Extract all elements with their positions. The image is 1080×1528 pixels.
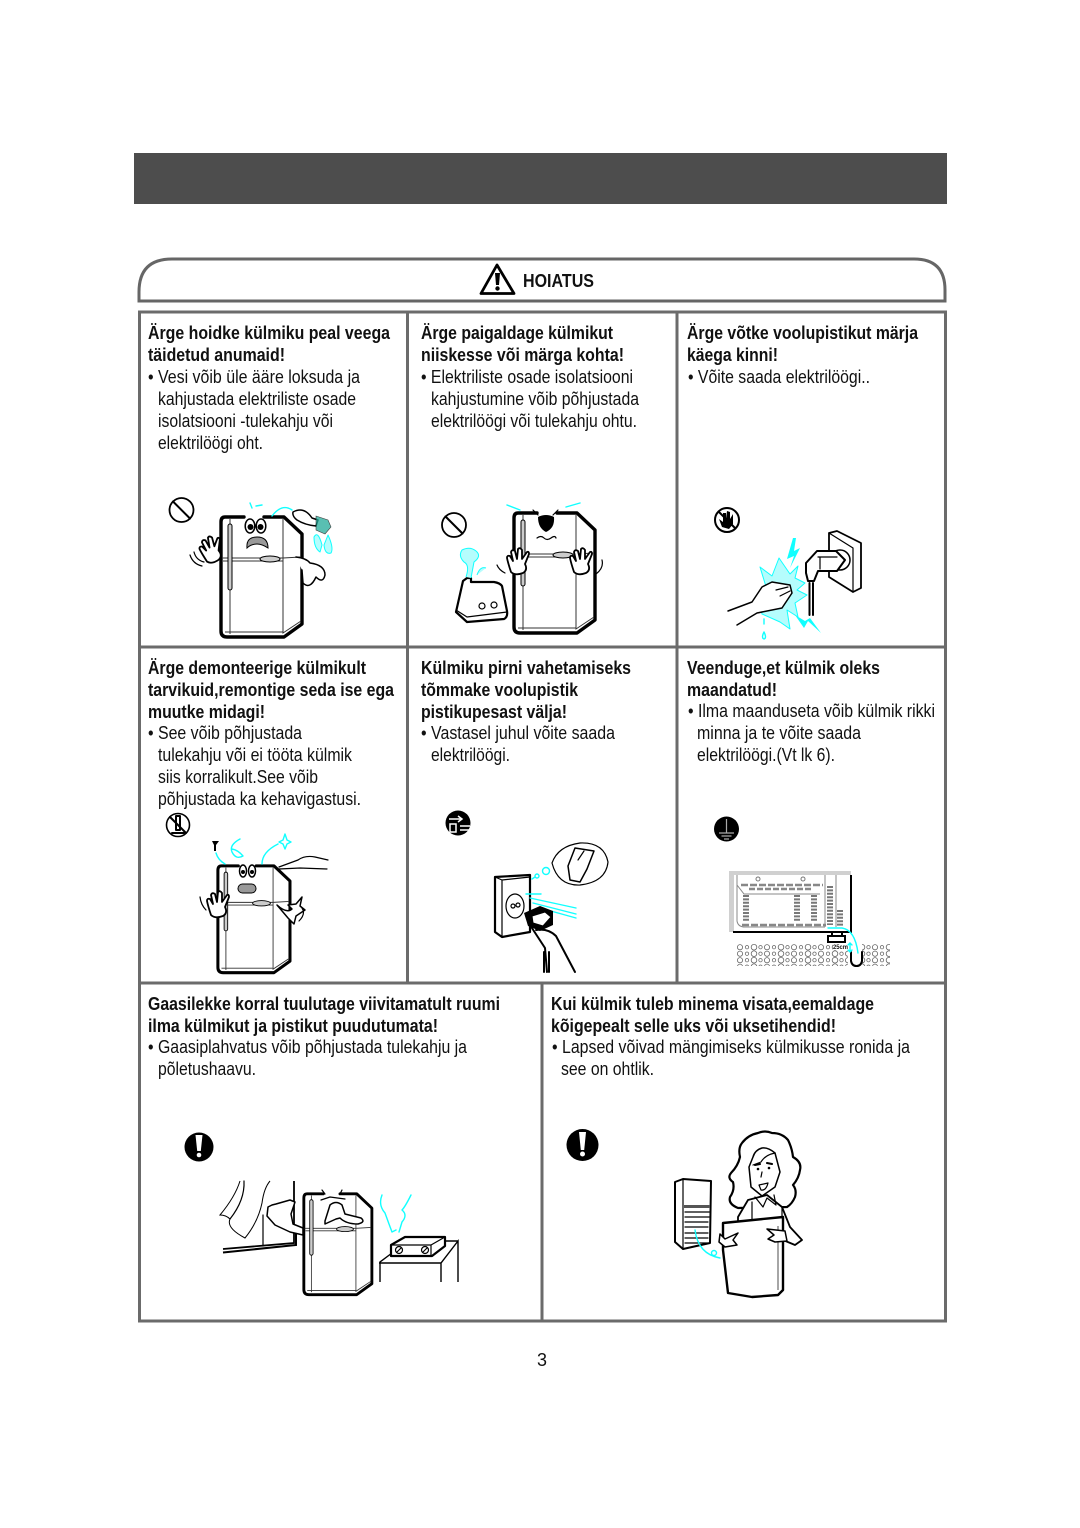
heading: pistikupesast välja! xyxy=(421,702,567,722)
icon: no disassembly xyxy=(166,814,190,836)
banner heading: HOIATUS xyxy=(523,271,594,291)
illustration: woman removing fridge door xyxy=(675,1132,802,1297)
body text: • Võite saada elektrilöögi.. xyxy=(688,367,870,387)
body text: elektrilöögi.(Vt lk 6). xyxy=(697,745,835,765)
illustration: rear of fridge with ground wire: 25cm xyxy=(833,944,848,951)
heading: tarvikuid,remontige seda ise ega xyxy=(148,680,395,700)
page number: 3 xyxy=(537,1350,547,1370)
illustration: fridge, window and gas stove xyxy=(220,1181,458,1295)
body text: siis korralikult.See võib xyxy=(158,767,318,787)
body text xyxy=(688,701,935,765)
heading xyxy=(687,323,919,365)
body text xyxy=(421,367,640,431)
heading: käega kinni! xyxy=(687,345,778,365)
illustration: fridge with water bottle xyxy=(190,503,332,637)
panel: damp location xyxy=(421,323,640,633)
heading xyxy=(421,323,624,365)
heading: tõmmake voolupistik xyxy=(421,680,579,700)
illustration: fridge and humidifier xyxy=(456,503,602,633)
body text: • See võib põhjustada xyxy=(148,723,303,743)
panel: water containers xyxy=(148,323,391,637)
illustration: wet hand and plug xyxy=(728,531,861,639)
icon: prohibition xyxy=(442,513,466,537)
body text: elektrilöögi. xyxy=(431,745,510,765)
body text: • Elektriliste osade isolatsiooni xyxy=(421,367,633,387)
body text: põhjustada ka kehavigastusi. xyxy=(158,789,361,809)
panel: grounding xyxy=(687,658,935,966)
heading xyxy=(148,994,500,1036)
icon: warning triangle xyxy=(481,265,514,294)
panel: gas leak xyxy=(148,994,500,1295)
header bar xyxy=(134,153,947,204)
heading xyxy=(551,994,874,1036)
body text xyxy=(421,723,616,765)
body text: • Gaasiplahvatus võib põhjustada tulekahju ja xyxy=(148,1037,468,1057)
heading: Ärge hoidke külmiku peal veega xyxy=(148,323,391,343)
body text xyxy=(148,723,361,809)
heading xyxy=(148,658,395,722)
body text xyxy=(148,367,361,453)
heading: ilma külmikut ja pistikut puudutumata! xyxy=(148,1016,438,1036)
body text: kahjustumine võib põhjustada xyxy=(431,389,640,409)
body text: • Lapsed võivad mängimiseks külmikusse ronida ja xyxy=(552,1037,911,1057)
body text: kahjustada elektriliste osade xyxy=(158,389,356,409)
heading xyxy=(148,323,391,365)
heading: maandatud! xyxy=(687,680,777,700)
heading: Veenduge,et külmik oleks xyxy=(687,658,880,678)
body text: minna ja te võite saada xyxy=(697,723,862,743)
icon: mandatory xyxy=(566,1129,598,1161)
body text: põletushaavu. xyxy=(158,1059,256,1079)
heading xyxy=(421,658,631,722)
heading: Gaasilekke korral tuulutage viivitamatult ruumi xyxy=(148,994,500,1014)
heading: kõigepealt selle uks või uksetihendid! xyxy=(551,1016,836,1036)
illustration: pulling out the plug xyxy=(495,843,608,972)
heading: muutke midagi! xyxy=(148,702,265,722)
icon: prohibition xyxy=(170,498,194,522)
body text: see on ohtlik. xyxy=(561,1059,654,1079)
body text: isolatsiooni -tulekahju või xyxy=(158,411,333,431)
icon: ground xyxy=(714,816,739,842)
heading: Ärge võtke voolupistikut märja xyxy=(687,323,919,343)
heading: Kui külmik tuleb minema visata,eemaldage xyxy=(551,994,874,1014)
icon: unplug xyxy=(446,810,470,836)
warning banner xyxy=(139,259,945,301)
icon: no touching xyxy=(715,508,739,532)
heading: Külmiku pirni vahetamiseks xyxy=(421,658,631,678)
icon: mandatory xyxy=(184,1132,214,1162)
heading xyxy=(687,658,880,700)
body text: • Vastasel juhul võite saada xyxy=(421,723,616,743)
body text: tulekahju või ei tööta külmik xyxy=(158,745,353,765)
panel: unplug when changing bulb xyxy=(421,658,631,972)
body text: elektrilöögi oht. xyxy=(158,433,263,453)
table grid xyxy=(140,312,946,1321)
panel: do not disassemble xyxy=(148,658,395,973)
body text: • Vesi võib üle ääre loksuda ja xyxy=(148,367,361,387)
body text: elektrilöögi või tulekahju ohtu. xyxy=(431,411,637,431)
heading: niiskesse või märga kohta! xyxy=(421,345,624,365)
panel: wet hands xyxy=(687,323,919,639)
heading: Ärge demonteerige külmikult xyxy=(148,658,366,678)
body text: • Ilma maanduseta võib külmik rikki xyxy=(688,701,935,721)
panel: disposal xyxy=(551,994,911,1297)
heading: täidetud anumaid! xyxy=(148,345,285,365)
heading: Ärge paigaldage külmikut xyxy=(421,323,613,343)
illustration: fridge with screwdriver xyxy=(200,834,328,973)
illustration: rear of fridge with ground wire xyxy=(729,871,890,966)
body text xyxy=(552,1037,911,1079)
body text xyxy=(148,1037,468,1079)
